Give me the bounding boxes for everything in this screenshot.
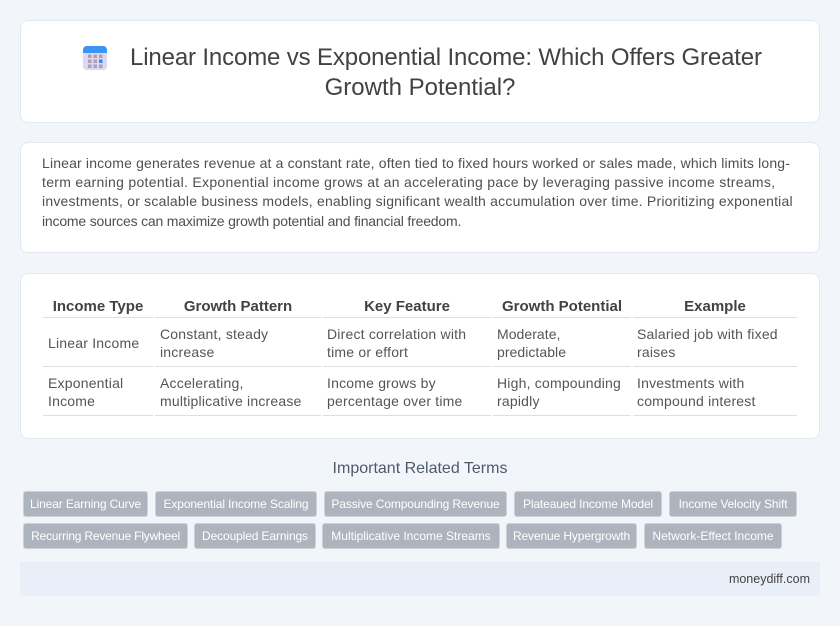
table row: exponential income — [43, 375, 797, 416]
table row: linear income: Constant, steady — [160, 326, 268, 342]
table row: linear income: Salaried job with fixed — [637, 326, 778, 342]
related terms tags: Decoupled Earnings — [202, 529, 308, 543]
related terms tags: Multiplicative Income Streams — [331, 529, 491, 543]
table row: exponential income: rapidly — [497, 393, 540, 409]
table header row: Income Type — [53, 298, 143, 315]
table row: linear income: time or effort — [327, 344, 408, 360]
panel: comparison table — [20, 273, 820, 439]
table row: linear income: Moderate, — [497, 326, 560, 342]
panel: description — [20, 142, 820, 253]
description text: income sources can maximize growth potential and financial freedom. — [42, 213, 461, 229]
footer bar — [20, 562, 820, 596]
related terms tags: Income Velocity Shift — [679, 497, 787, 511]
heading: related terms: Important Related Terms — [333, 460, 507, 477]
description text: term earning potential. Exponential income grows at an accelerating pace by leveraging passive income streams, — [42, 174, 775, 190]
table row: exponential income: multiplicative increase — [160, 393, 302, 409]
table header row: Key Feature — [364, 298, 450, 315]
table row: linear income: Direct correlation with — [327, 326, 466, 342]
description text: investments, or scalable business models, enabling significant wealth accumulation over time. Prioritizing exponential — [42, 193, 793, 209]
table row: exponential income: Accelerating, — [160, 375, 244, 391]
table row: exponential income: Income — [48, 393, 95, 409]
related terms tags — [23, 491, 797, 549]
title — [130, 44, 762, 101]
table row: linear income: predictable — [497, 344, 566, 360]
table row: exponential income: Exponential — [48, 375, 123, 391]
table row: linear income: raises — [637, 344, 676, 360]
table row: exponential income: Income grows by — [327, 375, 436, 391]
table row: linear income: Linear Income — [48, 335, 139, 351]
related terms tags: Recurring Revenue Flywheel — [31, 529, 180, 543]
table header row: Growth Potential — [502, 298, 622, 315]
table header row: Example — [684, 298, 746, 315]
description text: Linear income generates revenue at a constant rate, often tied to fixed hours worked or sales made, which limits long- — [42, 155, 790, 171]
related terms tags: Exponential Income Scaling — [164, 497, 308, 511]
table row: exponential income: percentage over time — [327, 393, 463, 409]
title: Linear Income vs Exponential Income: Which Offers Greater — [130, 44, 762, 71]
icon: calendar — [83, 46, 107, 70]
table header row — [43, 298, 797, 318]
footer source: moneydiff.com — [729, 572, 810, 586]
table row: exponential income: High, compounding — [497, 375, 621, 391]
table row: linear income: increase — [160, 344, 215, 360]
related terms tags: Linear Earning Curve — [30, 497, 141, 511]
related terms tags: Revenue Hypergrowth — [513, 529, 630, 543]
table row: exponential income: compound interest — [637, 393, 756, 409]
description text — [42, 155, 793, 229]
related terms tags: Plateaued Income Model — [523, 497, 653, 511]
table row: exponential income: Investments with — [637, 375, 744, 391]
related terms tags: Network-Effect Income — [652, 529, 774, 543]
table row: linear income — [43, 326, 797, 367]
title: Growth Potential? — [325, 74, 515, 101]
table header row: Growth Pattern — [184, 298, 292, 315]
panel: title header — [20, 20, 820, 123]
related terms tags: Passive Compounding Revenue — [331, 497, 500, 511]
